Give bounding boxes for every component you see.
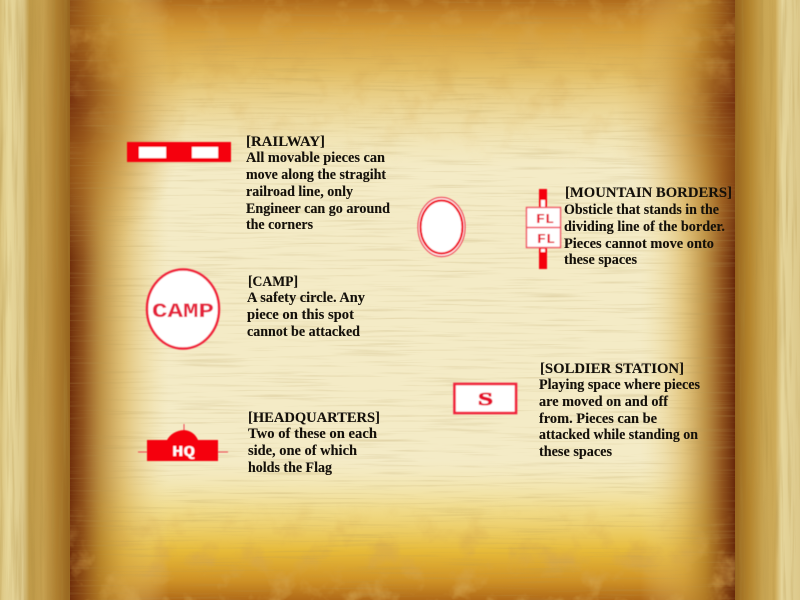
- icon: soldier station: [454, 384, 516, 413]
- railway description: the corners: [246, 217, 313, 233]
- panel: soldier station: [454, 361, 700, 460]
- headquarters description: side, one of which: [248, 443, 357, 459]
- panel: mountain borders: [418, 185, 732, 269]
- railway description: Engineer can go around: [246, 201, 390, 217]
- panel: headquarters: [138, 410, 380, 476]
- headquarters description: [HEADQUARTERS]: [248, 410, 380, 426]
- headquarters description: [248, 410, 380, 476]
- railway description: [246, 134, 390, 233]
- railway description: railroad line, only: [246, 184, 354, 200]
- icon: mountain border pieces: [526, 189, 561, 269]
- mountain borders description: [MOUNTAIN BORDERS]: [565, 185, 732, 201]
- camp description: cannot be attacked: [247, 324, 360, 340]
- mountain borders description: [564, 185, 732, 268]
- railway description: [RAILWAY]: [246, 134, 325, 150]
- icon: railway track: [127, 142, 231, 162]
- soldier station description: these spaces: [539, 444, 612, 460]
- soldier station description: [SOLDIER STATION]: [540, 361, 684, 377]
- panel: camp: [147, 270, 366, 348]
- camp description: piece on this spot: [247, 307, 354, 323]
- icon: mountain border pieces: FL: [537, 232, 555, 248]
- camp description: [247, 274, 366, 340]
- headquarters description: holds the Flag: [248, 460, 333, 476]
- icon: mountain border pieces: FL: [536, 212, 554, 228]
- icon: headquarters: [138, 424, 228, 461]
- icon: empty oval: [418, 198, 465, 256]
- headquarters description: Two of these on each: [248, 426, 377, 442]
- icon: headquarters: HQ: [172, 444, 195, 461]
- railway description: All movable pieces can: [246, 150, 385, 166]
- soldier station description: [539, 361, 700, 460]
- mountain borders description: dividing line of the border.: [564, 219, 725, 235]
- icon: soldier station: S: [478, 389, 493, 409]
- soldier station description: attacked while standing on: [539, 427, 698, 443]
- mountain borders description: these spaces: [564, 252, 637, 268]
- panel: railway: [127, 134, 390, 233]
- icon: camp circle: [147, 270, 219, 348]
- camp description: [CAMP]: [248, 274, 298, 290]
- soldier station description: are moved on and off: [539, 394, 668, 410]
- railway description: move along the stragiht: [246, 167, 386, 183]
- soldier station description: Playing space where pieces: [539, 377, 700, 393]
- icon: camp circle: CAMP: [152, 301, 214, 324]
- soldier station description: from. Pieces can be: [539, 411, 658, 427]
- camp description: A safety circle. Any: [247, 290, 366, 306]
- mountain borders description: Obsticle that stands in the: [564, 202, 720, 218]
- mountain borders description: Pieces cannot move onto: [564, 236, 714, 252]
